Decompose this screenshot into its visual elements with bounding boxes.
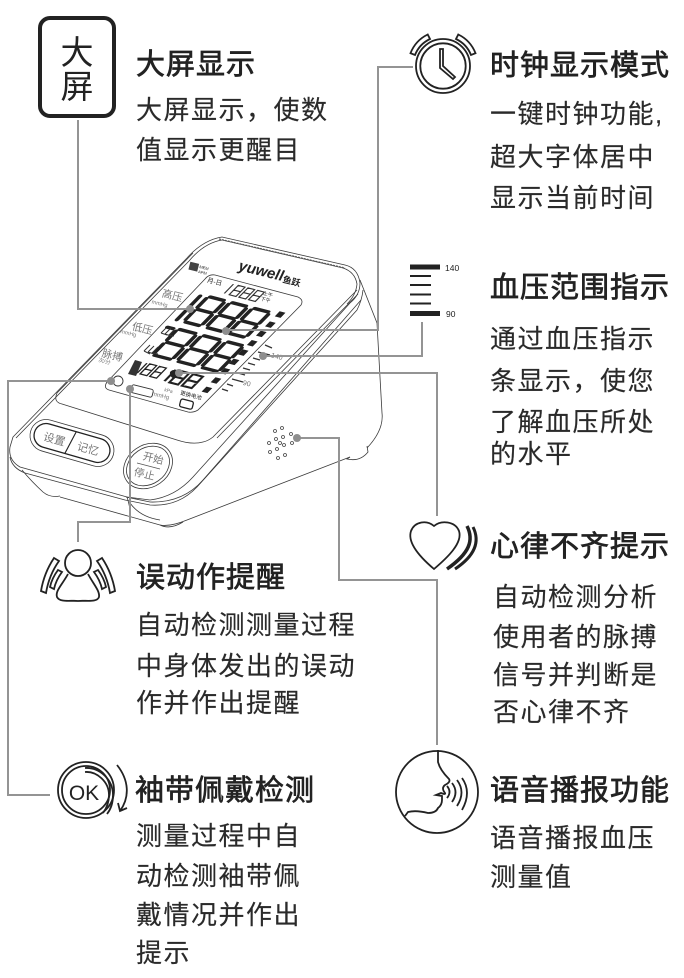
text: pressure range: 的水平 <box>490 439 573 469</box>
monitor feet <box>22 446 368 527</box>
LCD seven-segment readout <box>124 279 297 393</box>
blood pressure monitor illustration: MEM <box>199 264 209 271</box>
blood pressure monitor illustration: kPa <box>163 387 174 395</box>
connector: arrhythmia <box>175 369 437 516</box>
icon: pressure range bar <box>410 263 459 319</box>
text: clock mode: 超大字体居中 <box>490 142 655 172</box>
text: cuff detection: 动检测袖带佩 <box>136 861 301 891</box>
brand logo <box>236 257 303 289</box>
blood pressure monitor illustration: 下午 <box>260 295 271 305</box>
blood pressure monitor illustration <box>10 237 382 527</box>
heading: voice: 语音播报功能 <box>490 774 670 807</box>
text: clock mode <box>490 99 664 213</box>
icon: speaking face <box>396 750 478 833</box>
connector: motion error <box>78 385 134 542</box>
text: cuff detection: 提示 <box>136 938 191 968</box>
brand logo: 鱼跃 <box>282 273 302 288</box>
text: large screen: 值显示更醒目 <box>136 135 301 165</box>
blood pressure monitor illustration: 90 <box>242 380 251 389</box>
text: motion error: 中身体发出的误动 <box>136 651 356 681</box>
icon: cuff OK <box>58 762 127 818</box>
blood pressure monitor illustration: 次/分 <box>97 356 112 367</box>
heading: clock mode: 时钟显示模式 <box>490 49 670 82</box>
icon: cuff OK: OK <box>69 782 99 805</box>
screen glass <box>56 253 357 443</box>
text: clock mode: 显示当前时间 <box>490 183 655 213</box>
blood pressure monitor illustration: APM <box>198 269 207 276</box>
text: cuff detection: 戴情况并作出 <box>136 900 301 930</box>
monitor top shell <box>10 237 360 500</box>
text: cuff detection <box>136 821 301 968</box>
start stop button: 停止 <box>133 465 156 483</box>
text: motion error: 作并作出提醒 <box>136 688 301 718</box>
heading: large screen: 大屏显示 <box>136 48 256 81</box>
LCD labels <box>151 285 185 312</box>
text: clock mode: 一键时钟功能, <box>490 99 664 129</box>
text: large screen <box>136 95 329 165</box>
blood pressure monitor illustration: 140 <box>270 352 283 362</box>
start stop button: 开始 <box>142 449 166 467</box>
text: pressure range: 通过血压指示 <box>490 324 655 354</box>
text: arrhythmia: 使用者的脉搏 <box>493 622 658 652</box>
scale ticks <box>222 345 272 391</box>
speaker holes <box>268 426 294 460</box>
start stop button <box>115 434 181 498</box>
text: large screen: 大屏显示，使数 <box>136 95 329 125</box>
icon: pressure range bar: 90 <box>446 309 456 319</box>
text: voice <box>490 823 655 892</box>
connector: voice <box>293 434 437 745</box>
connector: pressure range <box>259 322 422 360</box>
text: voice: 语音播报血压 <box>490 823 655 853</box>
heading: pressure range: 血压范围指示 <box>490 271 670 304</box>
blood pressure monitor illustration: 脉搏 <box>101 347 125 364</box>
text: cuff detection: 测量过程中自 <box>136 821 301 851</box>
monitor base body <box>60 280 382 525</box>
trend chevrons <box>161 328 174 336</box>
blood pressure monitor illustration: 低压 <box>131 320 155 338</box>
icon: heart rhythm <box>410 522 476 569</box>
LCD labels: mmHg <box>151 299 168 309</box>
icon: large screen: 大 <box>60 34 94 71</box>
LCD labels: 高压 <box>161 287 185 305</box>
text: arrhythmia: 否心律不齐 <box>493 697 631 727</box>
heading: arrhythmia: 心律不齐提示 <box>490 530 670 563</box>
icon: alarm clock <box>410 34 476 93</box>
brand logo: yuwell <box>236 257 286 285</box>
icon: pressure range bar: 140 <box>445 263 459 273</box>
text: pressure range: 条显示，使您 <box>490 366 655 396</box>
text: voice: 测量值 <box>490 862 573 892</box>
connector: cuff detection <box>8 377 115 795</box>
heading: motion error: 误动作提醒 <box>136 561 286 594</box>
connector: clock mode <box>222 67 413 335</box>
blood pressure monitor illustration: mmHg <box>151 391 170 401</box>
blood pressure monitor illustration: 更换电池 <box>179 389 203 402</box>
setting and memory buttons: 记忆 <box>76 440 100 458</box>
icon: large screen: 屏 <box>60 68 94 105</box>
text: pressure range <box>490 324 655 469</box>
text: motion error: 自动检测测量过程 <box>136 610 356 640</box>
connector: large screen <box>78 120 194 313</box>
text: pressure range: 了解血压所处 <box>490 407 655 437</box>
setting and memory buttons <box>26 416 118 470</box>
blood pressure monitor illustration: 上午 <box>262 290 274 299</box>
text: arrhythmia: 信号并判断是 <box>493 660 658 690</box>
blood pressure monitor illustration: mmHg <box>120 329 137 339</box>
icon: moving person <box>41 550 115 601</box>
icon: large screen <box>40 18 114 116</box>
text: arrhythmia <box>493 582 658 727</box>
LCD outline <box>105 275 302 412</box>
text: motion error <box>136 610 356 718</box>
text: arrhythmia: 自动检测分析 <box>493 582 658 612</box>
blood pressure monitor illustration: 月-日 <box>206 276 223 288</box>
setting and memory buttons: 设置 <box>42 430 67 449</box>
heading: cuff detection: 袖带佩戴检测 <box>135 774 315 807</box>
